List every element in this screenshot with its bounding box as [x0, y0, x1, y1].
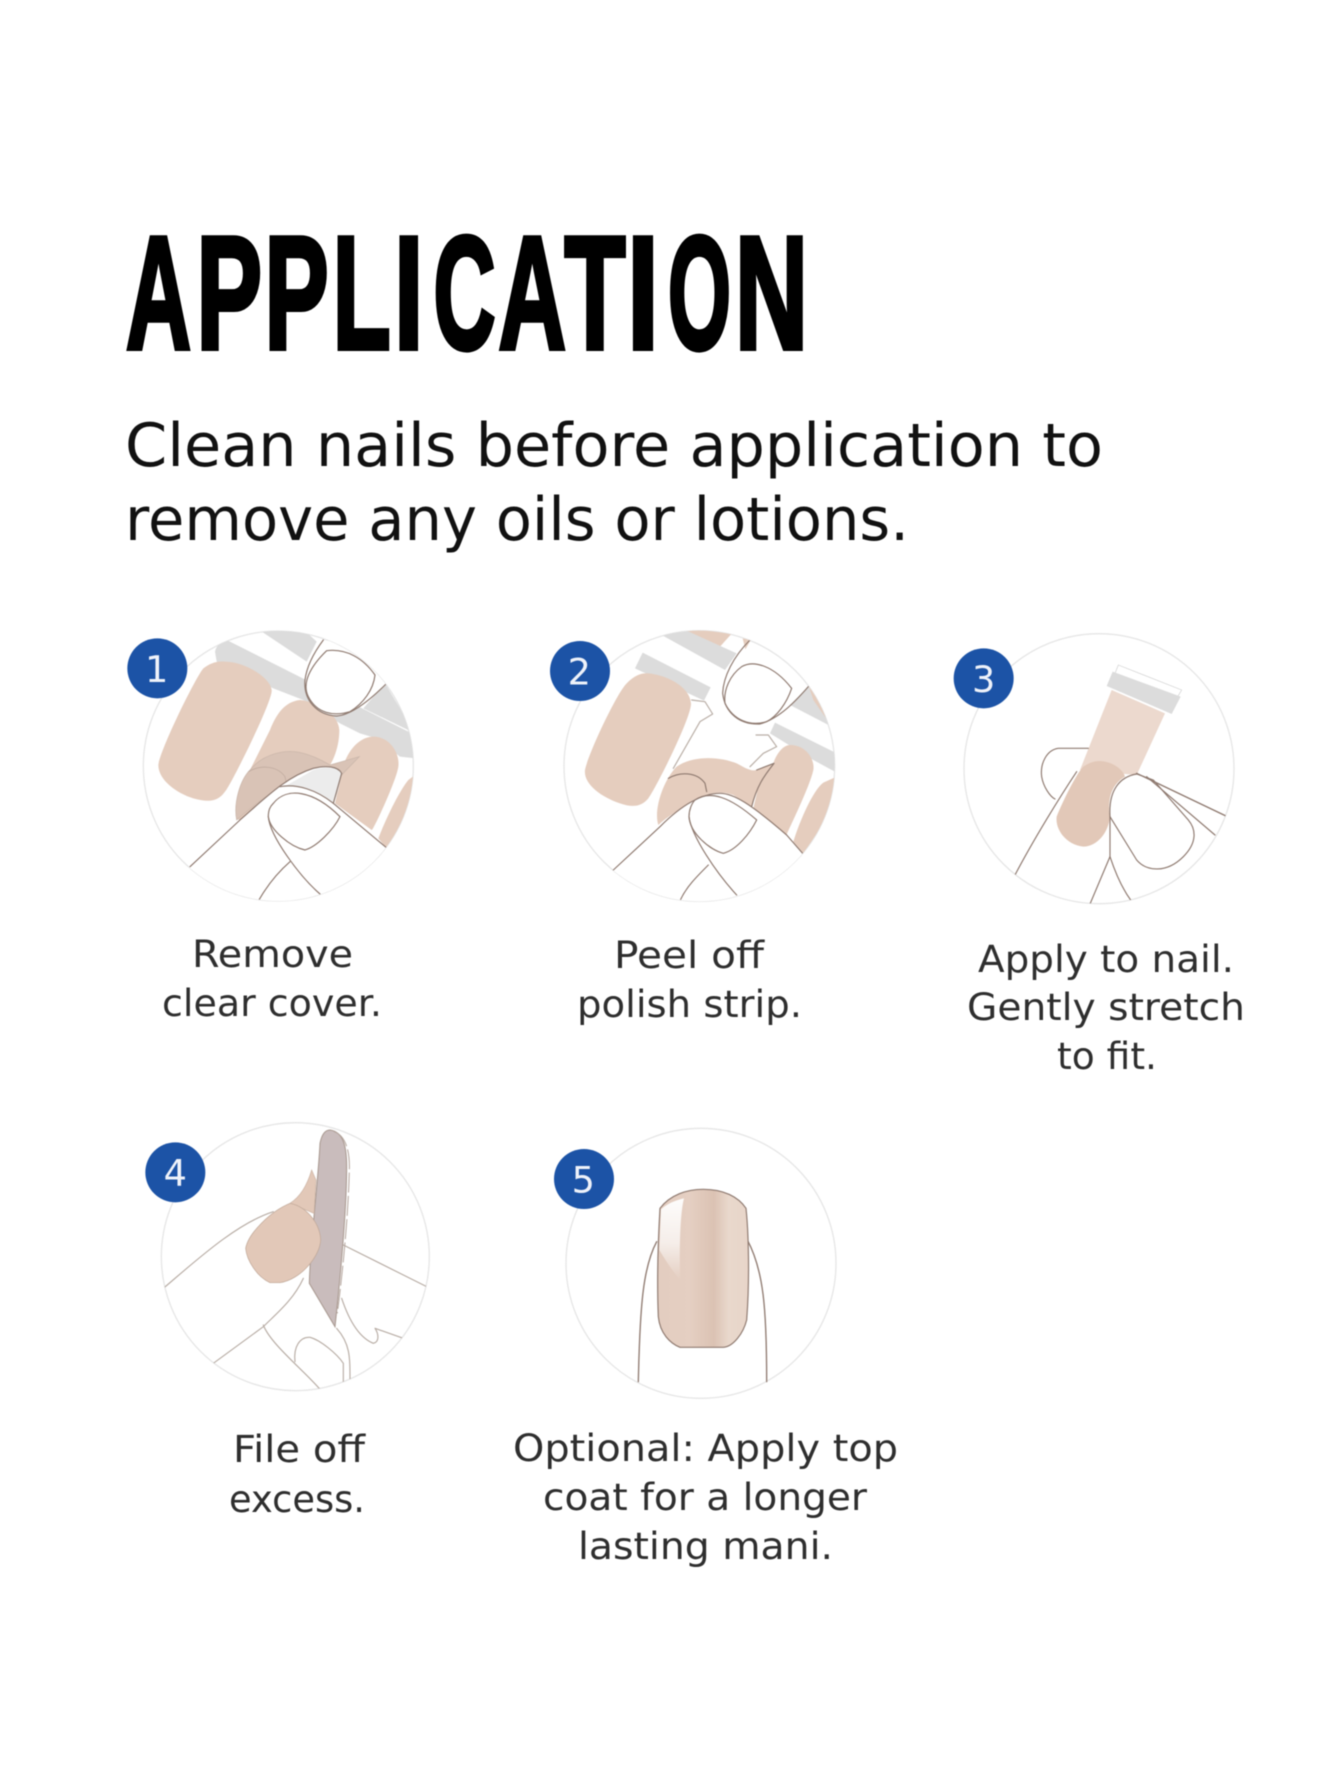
badge 2: 2	[568, 651, 591, 694]
subtitle text: remove any oils or lotions.	[125, 485, 909, 555]
step 4 illustration	[145, 1123, 429, 1391]
title: O	[668, 204, 731, 384]
title: I	[394, 204, 424, 384]
title: T	[564, 204, 626, 384]
badge 3	[954, 648, 1014, 708]
step 4 caption	[229, 1428, 367, 1521]
step 2 caption: polish strip.	[577, 983, 802, 1026]
badge 5	[554, 1149, 614, 1209]
step 3 caption: to fit.	[1057, 1035, 1157, 1078]
subtitle text: Clean nails before application to	[125, 411, 1103, 481]
badge 2	[550, 641, 610, 701]
subtitle text	[125, 411, 1103, 555]
step 4 caption: excess.	[229, 1478, 365, 1521]
step 2 caption	[577, 934, 802, 1026]
step 2 illustration	[550, 628, 837, 917]
step 1 caption: Remove	[192, 933, 353, 976]
badge 1	[127, 638, 187, 698]
title: N	[735, 204, 808, 384]
step 5 caption	[513, 1427, 898, 1568]
step 3 illustration	[954, 634, 1234, 904]
step 5 caption: Optional: Apply top	[513, 1427, 898, 1470]
step 5 caption: lasting mani.	[578, 1525, 833, 1568]
badge 4	[145, 1142, 205, 1202]
step 1 caption: clear cover.	[162, 982, 382, 1025]
badge 1: 1	[145, 648, 168, 691]
title: C	[434, 204, 496, 384]
step 5 caption: coat for a longer	[543, 1476, 868, 1519]
title: A	[126, 204, 191, 384]
step 5 illustration	[554, 1128, 836, 1398]
step 4 caption: File off	[233, 1428, 367, 1471]
title: I	[627, 204, 659, 384]
title: P	[265, 204, 329, 384]
title: A	[498, 204, 566, 384]
step 3 caption: Apply to nail.	[978, 938, 1234, 981]
badge 3: 3	[972, 658, 995, 701]
title: P	[196, 204, 262, 384]
step 2 caption: Peel off	[614, 934, 766, 977]
title: L	[333, 204, 391, 384]
step 3 caption	[967, 938, 1245, 1078]
step 1 caption	[162, 933, 382, 1025]
badge 5: 5	[572, 1159, 595, 1202]
step 1 illustration	[127, 629, 415, 917]
step 3 caption: Gently stretch	[967, 986, 1245, 1029]
badge 4: 4	[164, 1152, 187, 1195]
